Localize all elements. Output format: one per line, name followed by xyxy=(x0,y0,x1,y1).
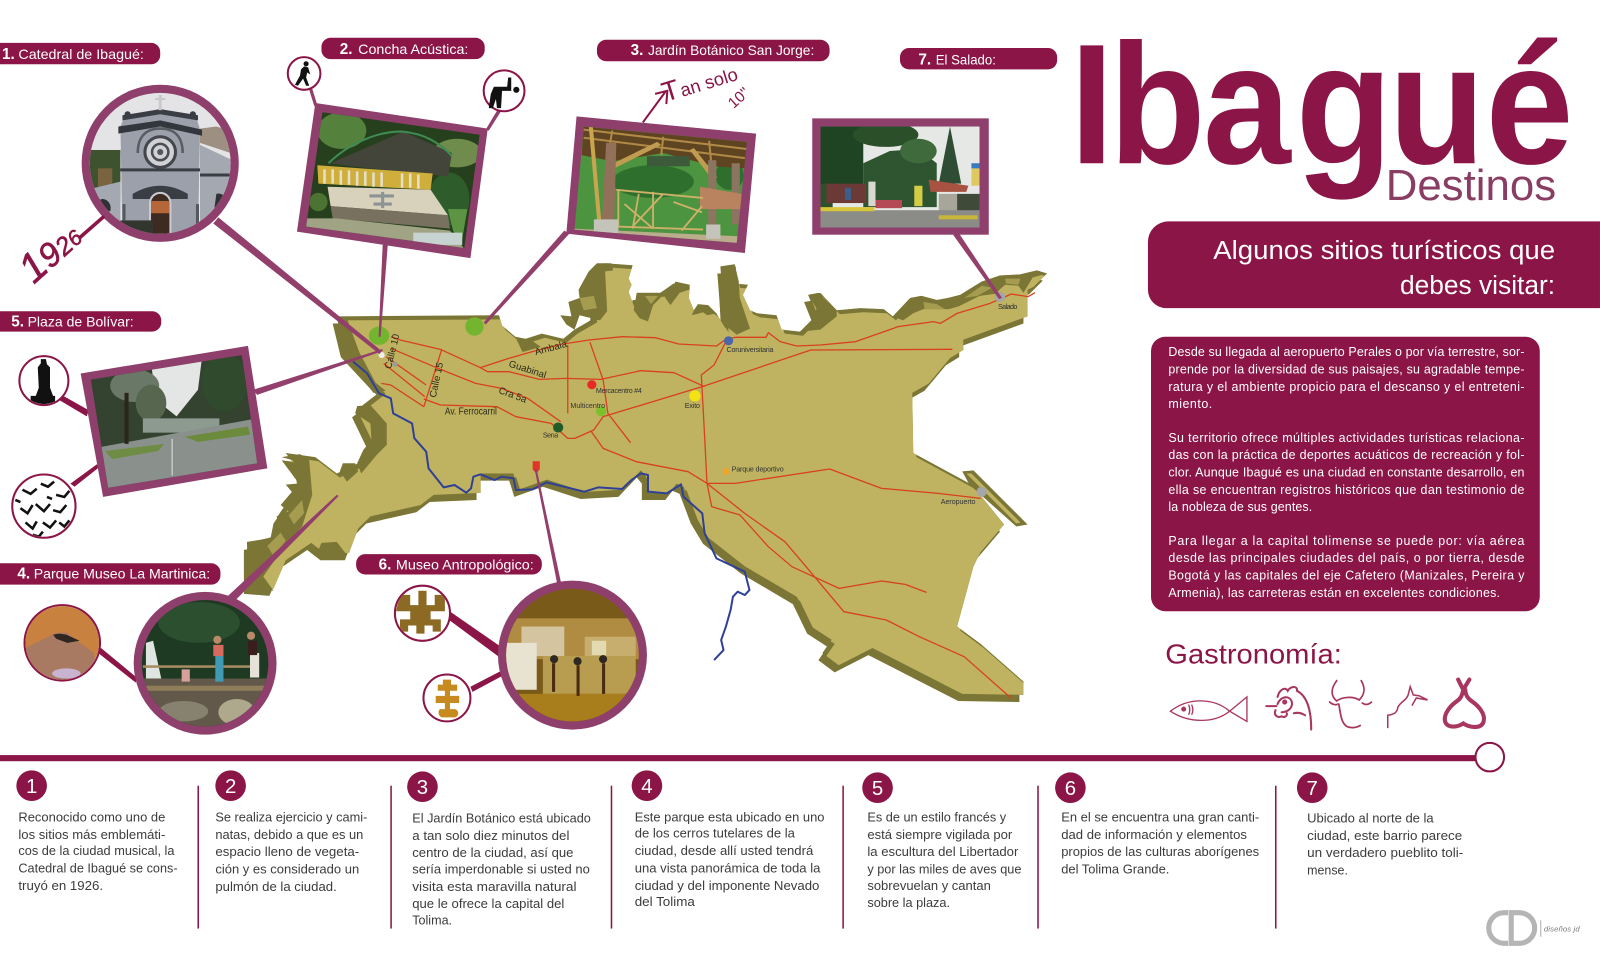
connector lines xyxy=(59,89,1002,692)
column 3 xyxy=(407,771,591,927)
panel: description: miento. xyxy=(1168,397,1212,411)
column 2: pulmón de la ciudad. xyxy=(215,879,337,894)
pill 7: 7. xyxy=(918,51,931,68)
map labels: Multicentro xyxy=(570,402,605,410)
column 1: cos de la ciudad musical, la xyxy=(18,843,175,858)
column 7: 7 xyxy=(1307,778,1318,800)
column 1: los sitios más emblemáti- xyxy=(18,827,165,842)
column 1: 1 xyxy=(26,776,37,798)
river xyxy=(353,362,749,660)
column 6 xyxy=(1055,772,1259,876)
column 4 xyxy=(632,770,824,909)
column 5: 5 xyxy=(872,778,883,800)
column 3: que le ofrece la capital del xyxy=(412,896,564,911)
map labels: Sena xyxy=(543,432,558,440)
heading: gastronomia: Gastronomía: xyxy=(1165,638,1342,669)
column 1: truyó en 1926. xyxy=(18,878,103,893)
column 6: propios de las culturas aborígenes xyxy=(1061,844,1259,859)
note: tan solo 10 xyxy=(643,56,753,122)
column 4: ciudad y del imponente Nevado xyxy=(635,878,819,893)
map labels: Parque deportivo xyxy=(732,465,784,473)
logo: disenos jd xyxy=(1489,913,1580,943)
banner: sitios turisticos: debes visitar: xyxy=(1400,272,1555,300)
roads xyxy=(381,293,1035,698)
column 5: está siempre vigilada por xyxy=(867,827,1013,842)
map labels: Av. Ferrocarril xyxy=(445,406,497,417)
map labels xyxy=(383,303,1017,506)
note: tan solo 10: 10" xyxy=(725,84,753,112)
pill 2: 2. xyxy=(340,41,353,58)
column 2: espacio lleno de vegeta- xyxy=(215,844,359,859)
panel: description: prende por la diversidad de sus paisajes, su agradable tempe- xyxy=(1168,362,1524,376)
subtitle: Destinos xyxy=(1386,161,1556,210)
pill 4: Parque Museo La Martinica: xyxy=(34,567,210,582)
photo: concha acustica xyxy=(296,102,490,265)
pill 1: Catedral de Ibagué: xyxy=(18,47,144,62)
column 5: la escultura del Libertador xyxy=(867,844,1019,859)
column 2: natas, debido a que es un xyxy=(215,827,363,842)
map relief shading xyxy=(247,263,1047,591)
banner: sitios turisticos: Algunos sitios turísticos que xyxy=(1213,237,1555,265)
column 3: Tolima. xyxy=(412,912,452,927)
column 4: del Tolima xyxy=(635,894,696,909)
column 4: 4 xyxy=(641,776,653,798)
gastronomy icons xyxy=(1170,680,1484,730)
pill 2 xyxy=(321,38,485,59)
panel: description: Su territorio ofrece múltiples actividades turísticas relaciona- xyxy=(1168,431,1524,445)
pill 5: 5. xyxy=(11,314,24,331)
column 3: 3 xyxy=(417,777,428,799)
column 3: sería imperdonable si usted no xyxy=(412,861,590,876)
column 4: de los cerros tutelares de la xyxy=(635,826,796,841)
photo: jardin botanico xyxy=(566,116,756,253)
panel: description: ratura y el ambiente propicio para el descanso y el entreteni- xyxy=(1168,380,1524,394)
map labels: Cra 5a xyxy=(497,385,529,406)
column 3: visita esta maravilla natural xyxy=(412,879,577,894)
year 1926 xyxy=(9,212,104,291)
photo: parque museo la martinica xyxy=(134,592,277,735)
map labels: Aeropuerto xyxy=(941,498,976,506)
icon: fish xyxy=(1170,697,1247,721)
column 3: a tan solo diez minutos del xyxy=(412,828,569,843)
column 1 xyxy=(16,770,178,893)
pill 6 xyxy=(356,554,542,574)
panel: description: Desde su llegada al aeropuerto Perales o por vía terrestre, sor- xyxy=(1168,345,1524,359)
column 3: centro de la ciudad, así que xyxy=(412,845,573,860)
map labels: Salado xyxy=(998,303,1017,311)
timeline bar xyxy=(0,743,1504,771)
column 4: una vista panorámica de toda la xyxy=(635,860,821,875)
panel: description: clor. Aunque Ibagué es una ciudad en constante desarrollo, en xyxy=(1168,466,1525,480)
pill 7: El Salado: xyxy=(936,52,996,67)
column 4: Este parque esta ubicado en uno xyxy=(635,809,824,824)
panel: description xyxy=(1151,337,1540,611)
column 6: En el se encuentra una gran canti- xyxy=(1061,809,1259,824)
icon: nevado del tolima xyxy=(22,602,104,684)
column 3: El Jardín Botánico está ubicado xyxy=(412,810,591,825)
map labels: Coruniversitaria xyxy=(727,346,774,354)
panel: description: Armenia), las carreteras están en excelentes condiciones. xyxy=(1168,586,1500,600)
map labels: Calle 15 xyxy=(428,362,446,399)
icon: gold figure xyxy=(395,586,450,641)
panel: description: das con la práctica de deportes acuáticos de recreación y fol- xyxy=(1168,448,1524,462)
column 2: ción y es considerado un xyxy=(215,861,359,876)
pill 3: 3. xyxy=(631,42,643,59)
pill 4: 4. xyxy=(17,566,30,583)
column 2 xyxy=(215,770,367,894)
pill 2: Concha Acústica: xyxy=(358,42,468,57)
map labels: Mercacentro #4 xyxy=(596,387,642,395)
panel: description: Para llegar a la capital tolimense se puede por: vía aérea xyxy=(1168,534,1525,548)
icon: statue xyxy=(19,356,68,406)
pill 7 xyxy=(900,48,1057,69)
panel: description: ella se encuentran registros históricos que dan testimonio de xyxy=(1168,483,1525,497)
column 6: del Tolima Grande. xyxy=(1061,861,1169,876)
map labels: Guabinal xyxy=(507,359,548,381)
map labels: Exito xyxy=(685,402,700,410)
column 7: mense. xyxy=(1307,862,1348,877)
icon: walking person xyxy=(288,57,320,90)
panel: description: desde las principales ciudades del país, o por tierra, desde xyxy=(1168,551,1525,565)
map of Ibagué xyxy=(244,263,1050,702)
note: tan solo 10: Tan solo xyxy=(658,56,741,108)
icon: chicken xyxy=(1266,687,1311,730)
pill 1: 1. xyxy=(2,46,15,63)
photo: el salado xyxy=(812,118,989,235)
column 5: sobre la plaza. xyxy=(867,895,950,910)
pill 3 xyxy=(597,40,830,61)
map labels: Ambala xyxy=(534,339,569,358)
column 5: sobrevuelan y cantan xyxy=(867,878,991,893)
column 5: y por las miles de aves que xyxy=(867,861,1021,876)
title: Ibagué xyxy=(1070,8,1573,200)
map markers xyxy=(369,292,1005,497)
column 2: 2 xyxy=(225,776,236,798)
column 5 xyxy=(862,772,1021,910)
icon: cow xyxy=(1330,681,1371,728)
column 7: un verdadero pueblito toli- xyxy=(1307,845,1463,860)
column 7: Ubicado al norte de la xyxy=(1307,810,1435,825)
column 1: Catedral de Ibagué se cons- xyxy=(18,860,178,875)
map labels: Calle 10 xyxy=(383,332,402,370)
pill 4 xyxy=(0,563,220,585)
column 6: dad de información y elementos xyxy=(1061,827,1247,842)
heading pills xyxy=(0,38,1057,585)
column 5: Es de un estilo francés y xyxy=(867,809,1007,824)
column 7: ciudad, este barrio parece xyxy=(1307,828,1462,843)
banner: sitios turisticos xyxy=(1148,221,1600,308)
icon: garlic xyxy=(1445,680,1484,727)
year 1926: 1926 xyxy=(9,212,90,291)
panel: description: Bogotá y las capitales del eje Cafetero (Manizales, Pereira y xyxy=(1168,569,1525,583)
icon: birds xyxy=(12,474,76,538)
photo: catedral xyxy=(82,85,245,242)
column 2: Se realiza ejercicio y cami- xyxy=(215,809,367,824)
column 1: Reconocido como uno de xyxy=(18,809,165,824)
pill 1 xyxy=(0,43,160,64)
icon: pig xyxy=(1388,687,1428,728)
pill 6: 6. xyxy=(379,556,391,573)
photo: plaza de bolivar xyxy=(81,346,267,497)
pill 3: Jardín Botánico San Jorge: xyxy=(648,43,814,58)
pill 5: Plaza de Bolívar: xyxy=(28,315,134,330)
column 6: 6 xyxy=(1065,778,1076,800)
photo: museo antropologico xyxy=(498,581,647,730)
column 4: ciudad, desde allí usted tendrá xyxy=(635,843,814,858)
logo: disenos jd: diseños jd xyxy=(1544,925,1580,934)
icon: stretching person xyxy=(484,70,524,111)
pill 6: Museo Antropológico: xyxy=(396,557,534,572)
panel: description: la nobleza de sus gentes. xyxy=(1168,500,1312,514)
column 7 xyxy=(1297,772,1463,877)
pill 5 xyxy=(0,311,161,332)
icon: gold pendant xyxy=(423,674,470,721)
